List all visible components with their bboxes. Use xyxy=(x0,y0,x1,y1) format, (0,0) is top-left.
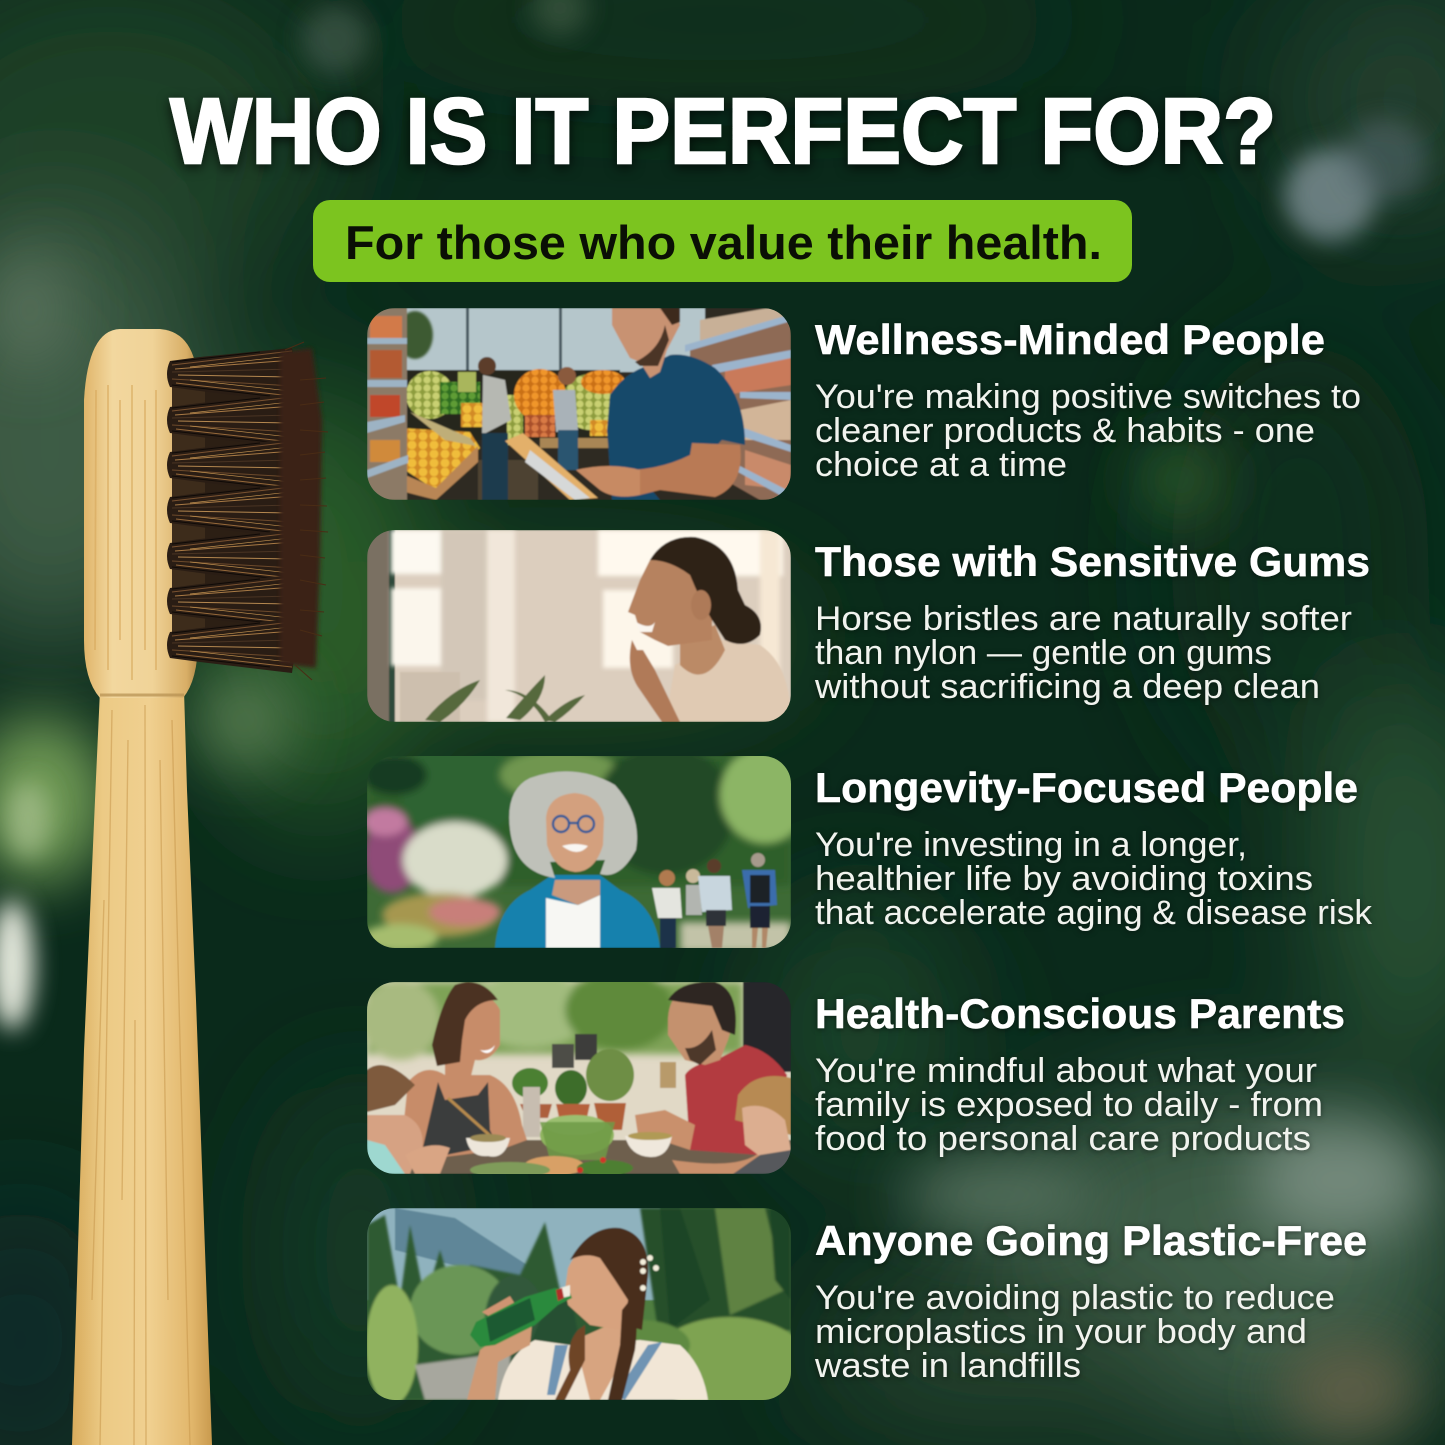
item 1: wellness-minded people: You're making positive switches to xyxy=(815,378,1361,416)
item 4: health-conscious parents: You're mindful about what your xyxy=(815,1052,1317,1090)
photo: man reading label in grocery store xyxy=(367,305,791,500)
item 2: those with sensitive gums: than nylon — gentle on gums xyxy=(815,634,1272,672)
item 5: anyone going plastic-free: You're avoiding plastic to reduce xyxy=(815,1279,1335,1317)
photo: woman smiling touching gums xyxy=(367,530,791,722)
toothbrush head xyxy=(84,329,198,698)
title: WHO IS IT PERFECT FOR? xyxy=(170,79,1276,183)
item 1: wellness-minded people: cleaner products & habits - one xyxy=(815,412,1315,450)
toothbrush xyxy=(72,329,328,1445)
toothbrush handle xyxy=(72,690,212,1445)
item 1: wellness-minded people: choice at a time xyxy=(815,446,1067,484)
photo: family meal outdoors xyxy=(360,970,791,1178)
photo: woman drinking from glass bottle xyxy=(367,1208,791,1400)
item 4: health-conscious parents: food to personal care products xyxy=(815,1120,1311,1158)
item 5: anyone going plastic-free: microplastics in your body and xyxy=(815,1313,1307,1351)
item 2: those with sensitive gums: Those with Sensitive Gums xyxy=(815,538,1370,585)
item 4: health-conscious parents: family is exposed to daily - from xyxy=(815,1086,1323,1124)
item 5: anyone going plastic-free xyxy=(814,1217,1367,1385)
item 3: longevity-focused people xyxy=(815,764,1373,932)
item 5: anyone going plastic-free: Anyone Going Plastic-Free xyxy=(815,1217,1367,1264)
photo: smiling senior woman outdoors xyxy=(367,756,791,948)
bristles xyxy=(167,342,328,680)
item 2: those with sensitive gums: Horse bristles are naturally softer xyxy=(815,600,1352,638)
item 4: health-conscious parents: Health-Conscious Parents xyxy=(815,990,1345,1037)
item 3: longevity-focused people: that accelerate aging & disease risk xyxy=(815,894,1373,932)
item 3: longevity-focused people: healthier life by avoiding toxins xyxy=(815,860,1313,898)
item 4: health-conscious parents xyxy=(815,990,1345,1158)
item 2: those with sensitive gums: without sacrificing a deep clean xyxy=(814,668,1320,706)
item 3: longevity-focused people: Longevity-Focused People xyxy=(815,764,1358,811)
item 1: wellness-minded people xyxy=(815,316,1361,484)
subtitle pill: For those who value their health. xyxy=(345,216,1102,269)
item 1: wellness-minded people: Wellness-Minded People xyxy=(815,316,1325,363)
subtitle pill xyxy=(313,200,1132,282)
item 5: anyone going plastic-free: waste in landfills xyxy=(814,1347,1081,1385)
item 3: longevity-focused people: You're investing in a longer, xyxy=(815,826,1247,864)
item 2: those with sensitive gums xyxy=(814,538,1370,706)
